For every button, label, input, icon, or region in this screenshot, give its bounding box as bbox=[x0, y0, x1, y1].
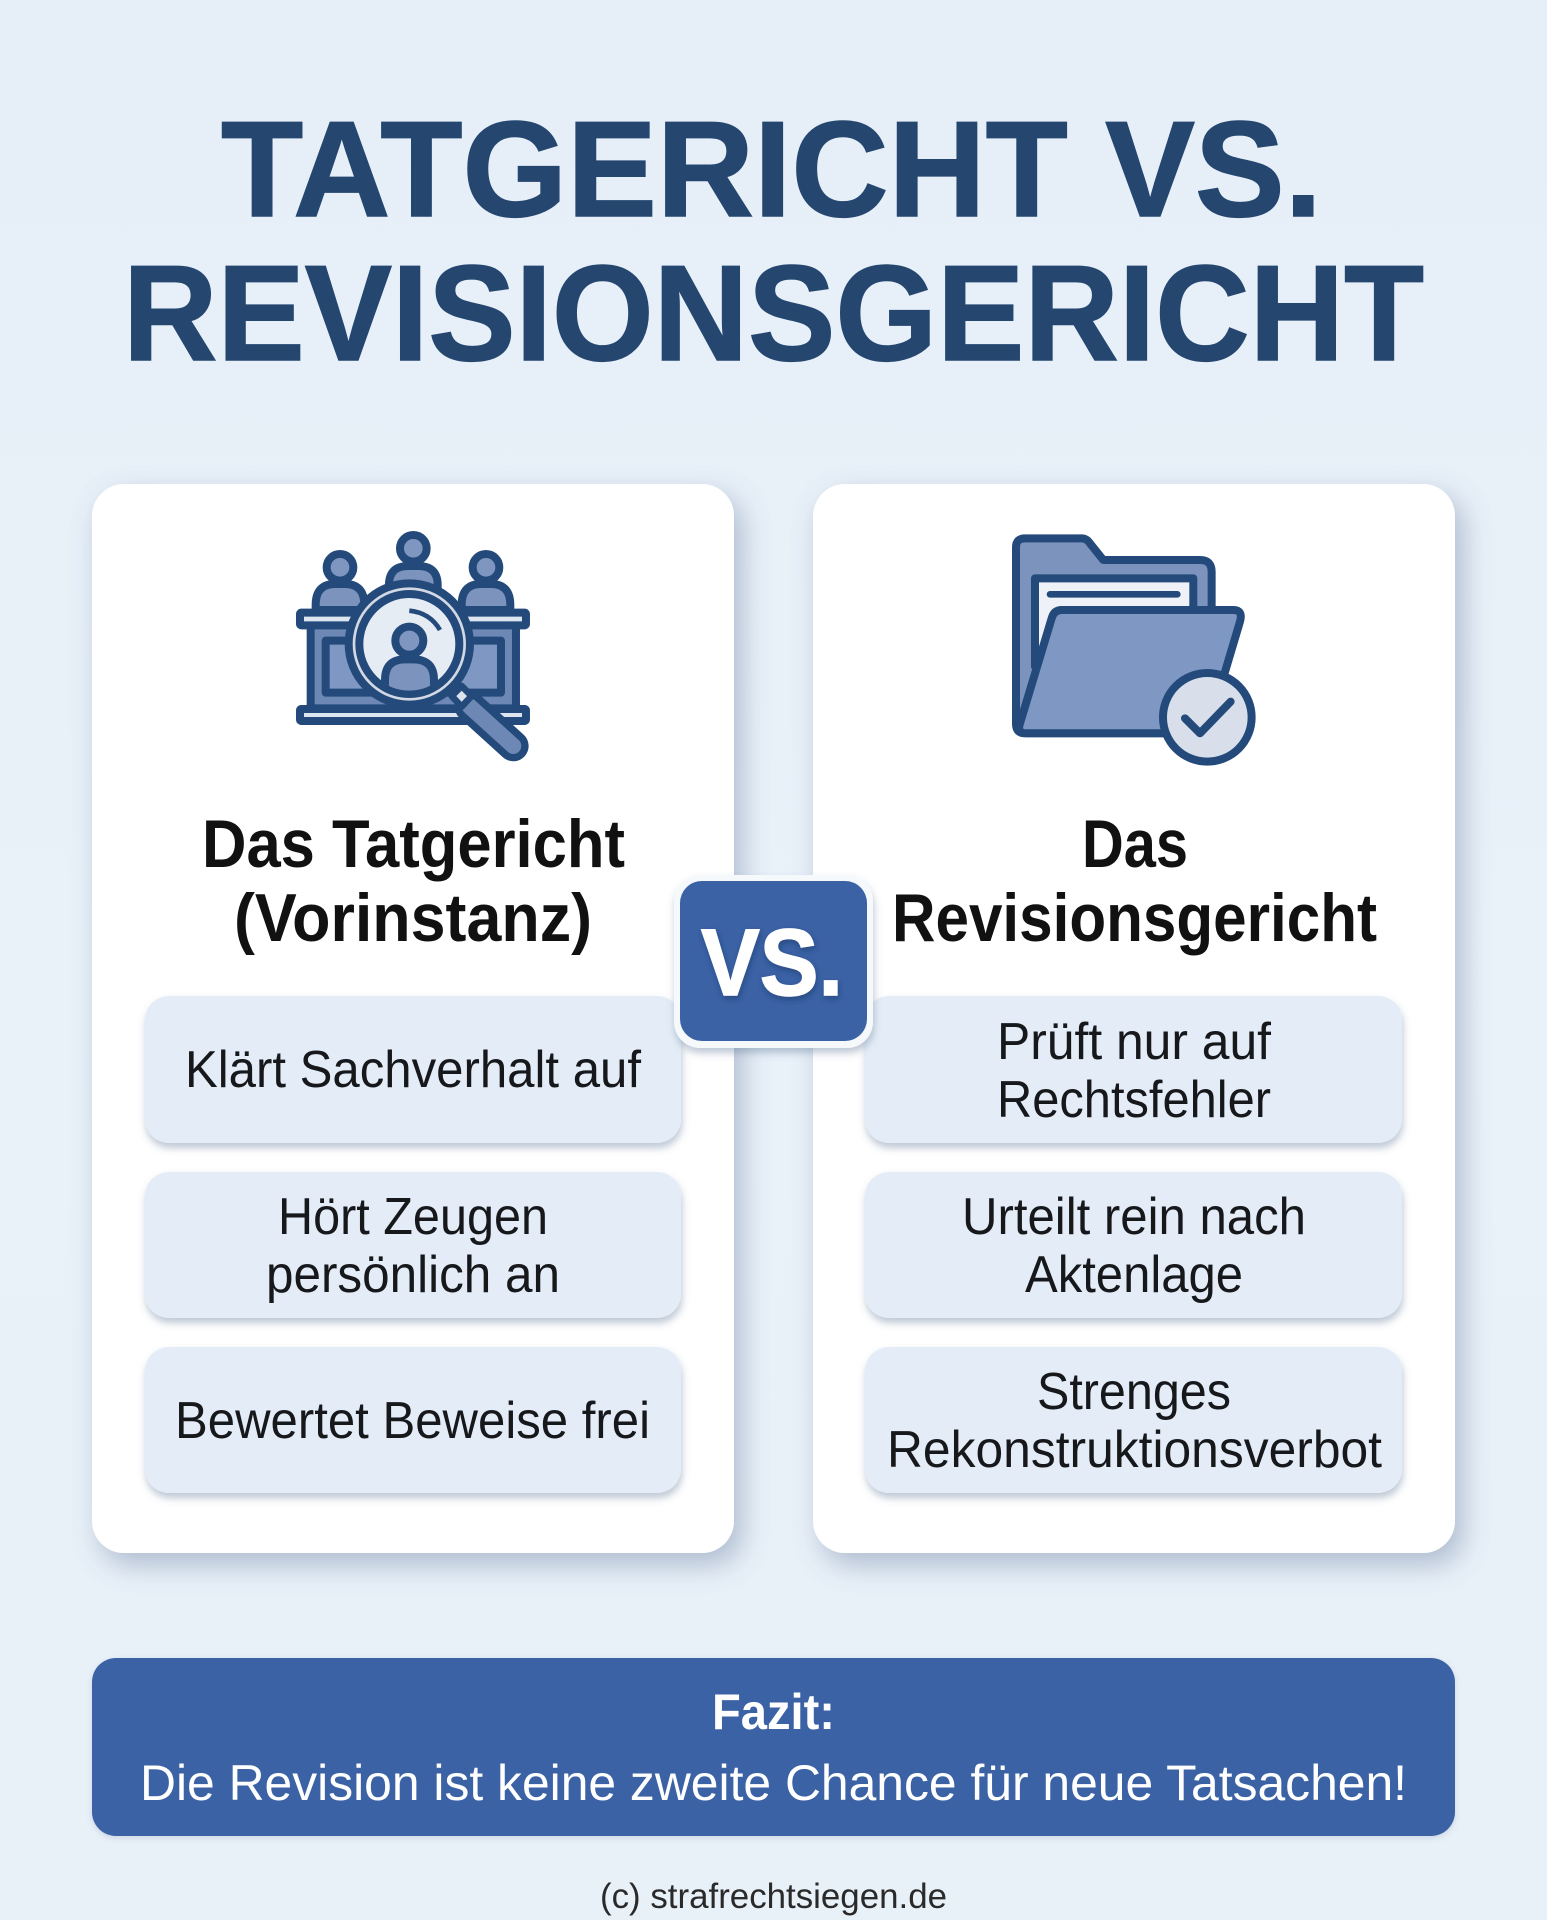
item: Klärt Sachverhalt auf: Klärt Sachverhalt auf bbox=[185, 1041, 642, 1099]
item: Strenges Rekonstruktionsverbot bbox=[865, 1347, 1402, 1493]
heading: Das Revisionsgericht bbox=[892, 806, 1377, 956]
item: Prüft nur auf Rechtsfehler bbox=[865, 996, 1402, 1143]
conclusion bar: Fazit: bbox=[712, 1684, 835, 1740]
item: Urteilt rein nach Aktenlage bbox=[865, 1172, 1402, 1318]
VS badge bbox=[674, 875, 873, 1048]
item: Hört Zeugen persönlich an: Hört Zeugen bbox=[278, 1188, 548, 1246]
item: Strenges Rekonstruktionsverbot: Strenges bbox=[1037, 1363, 1231, 1421]
heading: Das Tatgericht bbox=[202, 806, 625, 956]
heading: Das Tatgericht: Das Tatgericht bbox=[202, 806, 625, 882]
item: Urteilt rein nach Aktenlage: Aktenlage bbox=[1025, 1246, 1243, 1304]
icon: folder with check mark bbox=[1016, 538, 1252, 762]
title: REVISIONSGERICHT bbox=[123, 237, 1424, 389]
item: Klärt Sachverhalt auf bbox=[145, 996, 681, 1143]
item: Bewertet Beweise frei: Bewertet Beweise frei bbox=[175, 1392, 650, 1450]
panel: Tatgericht bbox=[92, 484, 734, 1553]
item: Urteilt rein nach Aktenlage: Urteilt rein nach bbox=[962, 1188, 1306, 1246]
item: Strenges Rekonstruktionsverbot: Rekonstruktionsverbot bbox=[887, 1421, 1383, 1479]
footer credit: (c) strafrechtsiegen.de bbox=[600, 1877, 947, 1916]
conclusion bar: Die Revision ist keine zweite Chance für neue Tatsachen! bbox=[140, 1755, 1407, 1811]
item: Hört Zeugen persönlich an: persönlich an bbox=[266, 1246, 560, 1304]
conclusion bar bbox=[92, 1658, 1455, 1836]
title: TATGERICHT VS. bbox=[221, 93, 1322, 245]
item: Prüft nur auf Rechtsfehler: Prüft nur auf bbox=[997, 1013, 1272, 1071]
heading: Das Revisionsgericht: Das bbox=[1082, 806, 1188, 882]
item: Bewertet Beweise frei bbox=[145, 1347, 681, 1493]
VS badge: VS. bbox=[701, 910, 843, 1016]
icon: court bench with magnifier bbox=[300, 535, 526, 746]
heading: Das Tatgericht: (Vorinstanz) bbox=[234, 880, 592, 956]
title bbox=[123, 93, 1424, 389]
item: Hört Zeugen persönlich an bbox=[145, 1172, 681, 1318]
panel: Revisionsgericht bbox=[813, 484, 1455, 1553]
item: Prüft nur auf Rechtsfehler: Rechtsfehler bbox=[997, 1071, 1271, 1129]
heading: Das Revisionsgericht: Revisionsgericht bbox=[892, 880, 1377, 956]
